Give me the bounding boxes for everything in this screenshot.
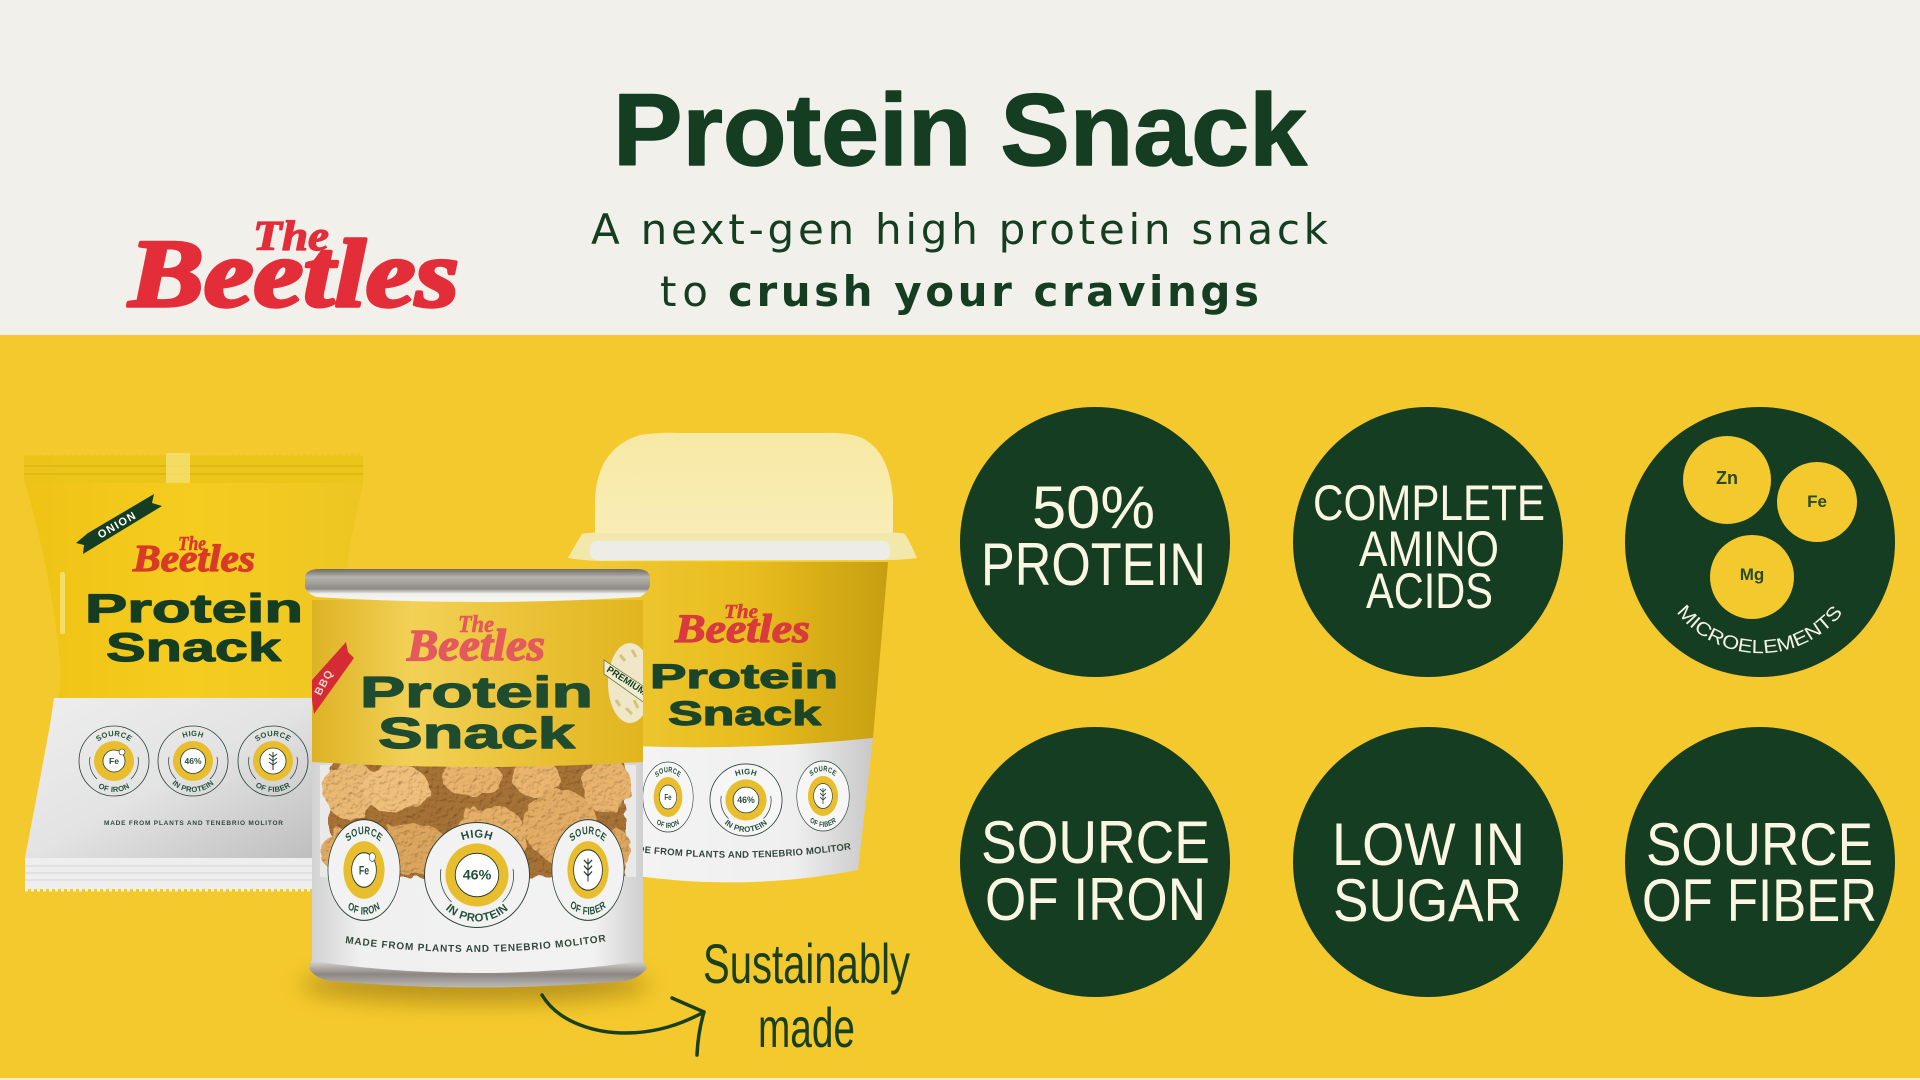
element: iron: Fe — [1807, 492, 1827, 511]
cup made-from line: MADE FROM PLANTS AND TENEBRIO MOLITOR — [643, 843, 851, 858]
bag product name — [85, 587, 303, 670]
claim: microelements — [1625, 407, 1895, 677]
ribbon: onion: ONION — [96, 509, 139, 541]
bag badge: source of iron: OF IRON — [98, 783, 130, 792]
bag upper yellow — [24, 453, 363, 700]
cup badge: source of iron: SOURCE — [655, 766, 681, 778]
claim: 50% protein: 50% — [1032, 474, 1155, 541]
can window background — [320, 765, 636, 877]
callout: sustainably made — [703, 932, 910, 1059]
ribbon: onion — [76, 494, 162, 554]
cup badge: high in protein — [710, 764, 782, 836]
bag logo: The — [178, 533, 206, 555]
cup badge: source of iron: OF IRON — [657, 819, 679, 828]
element: zinc: Zn — [1716, 468, 1738, 488]
claim: source of fiber: OF FIBER — [1642, 867, 1877, 934]
bag seal highlight — [166, 453, 190, 483]
header background — [0, 0, 1920, 335]
premium seal: PREMIUM — [604, 664, 648, 698]
cup lid dome — [595, 433, 893, 535]
brand logo: The Beetles: The — [253, 214, 329, 260]
element: zinc — [1683, 436, 1771, 524]
can badge: source of iron: OF IRON — [348, 902, 380, 915]
bag badge: source of iron: Fe — [109, 756, 119, 766]
can badge: source of iron — [328, 819, 400, 921]
bag badge: source of fiber: OF FIBER — [256, 782, 290, 792]
claim: complete amino acids: AMINO — [1359, 521, 1499, 577]
can made-from line: MADE FROM PLANTS AND TENEBRIO MOLITOR — [346, 934, 606, 952]
cup badge: source of iron: Fe — [664, 792, 672, 802]
cup badge: source of fiber: OF FIBER — [810, 818, 836, 827]
curved label: MICROELEMENTS — [1677, 604, 1841, 654]
ribbon: BBQ — [312, 642, 354, 714]
can logo: Beetles — [406, 621, 545, 670]
claim: 50% protein: PROTEIN — [981, 531, 1206, 598]
brand logo: The Beetles: Beetles — [128, 220, 459, 327]
can badge: source of iron: Fe — [359, 864, 369, 878]
product: snack cup — [568, 432, 917, 882]
cup badge: high in protein: IN PROTEIN — [724, 820, 768, 832]
cup badge: source of iron — [643, 762, 694, 832]
can yellow band — [312, 600, 643, 767]
can product name: Protein — [360, 668, 593, 717]
claim: source of fiber: SOURCE — [1646, 811, 1873, 878]
claim: source of iron: OF IRON — [985, 866, 1206, 933]
arrow — [542, 995, 704, 1055]
can product name: Snack — [378, 709, 576, 758]
can product name — [360, 668, 593, 758]
claim: complete amino acids: COMPLETE — [1313, 475, 1545, 531]
cup badge: source of fiber — [796, 760, 850, 832]
premium seal — [604, 643, 643, 723]
bag badge: source of iron — [78, 726, 150, 796]
claim: source of iron: SOURCE — [981, 809, 1210, 876]
product: snack bag — [24, 453, 363, 892]
yellow main panel — [0, 335, 1920, 1078]
ribbon: BBQ: BBQ — [313, 668, 336, 698]
element: magnesium: Mg — [1740, 565, 1764, 584]
bag badge: high in protein: 46% — [184, 756, 202, 766]
claim: complete amino acids — [1293, 407, 1563, 677]
bag badge: source of fiber — [238, 726, 308, 796]
claim: low in sugar: SUGAR — [1333, 867, 1522, 934]
bag badge: source of iron: SOURCE — [96, 730, 132, 742]
element: iron — [1777, 462, 1857, 542]
bag bottom seal — [25, 858, 320, 890]
cup product name: Protein — [650, 658, 838, 696]
cup badge: source of fiber: SOURCE — [810, 766, 837, 776]
bottom cream strip — [0, 1078, 1920, 1080]
cup logo: Beetles — [674, 606, 810, 651]
claim: low in sugar — [1293, 727, 1563, 997]
can badge: source of fiber: SOURCE — [570, 826, 607, 842]
bag product name: Protein — [85, 587, 303, 631]
subtitle: crush your cravings — [728, 267, 1259, 316]
bag badge: high in protein — [158, 726, 228, 796]
can badge: high in protein: HIGH — [460, 830, 493, 840]
claim: low in sugar: LOW IN — [1332, 811, 1525, 878]
cup logo: The — [724, 601, 758, 623]
bag lower white — [25, 698, 322, 858]
can badge: high in protein — [424, 822, 530, 928]
bag side highlight — [60, 572, 65, 634]
subtitle: A next-gen high protein snack — [591, 205, 1329, 254]
cup rim white band — [590, 541, 890, 560]
callout: sustainably made: Sustainably — [703, 932, 910, 995]
bag logo: Beetles — [132, 538, 255, 580]
can badge: high in protein: 46% — [463, 868, 492, 884]
cup badge: high in protein: HIGH — [734, 768, 757, 776]
claim: source of fiber — [1625, 727, 1895, 997]
cup badge: high in protein: 46% — [737, 795, 755, 805]
can cookies — [322, 755, 630, 877]
bag product name: Snack — [106, 626, 282, 670]
can badge: source of fiber — [552, 819, 624, 921]
can badge: source of fiber: OF FIBER — [570, 902, 606, 915]
claim: 50% protein — [960, 407, 1230, 677]
can badge: high in protein: IN PROTEIN — [446, 904, 508, 922]
subtitle — [591, 205, 1329, 316]
cup product name: Snack — [668, 695, 821, 733]
claim: complete amino acids: ACIDS — [1366, 563, 1493, 619]
claim: source of iron — [960, 727, 1230, 997]
bag badge: high in protein: HIGH — [182, 730, 204, 738]
bag badge: high in protein: IN PROTEIN — [172, 780, 214, 792]
subtitle: to — [660, 267, 708, 316]
callout: sustainably made: made — [758, 996, 855, 1059]
can badge: source of iron: SOURCE — [346, 826, 383, 842]
cup lid rim — [568, 533, 917, 561]
can lower body — [312, 760, 643, 982]
cup product name — [650, 658, 838, 733]
title: Protein Snack — [613, 73, 1307, 187]
product: can — [305, 569, 650, 988]
cup body yellow — [595, 562, 888, 747]
cup body white — [610, 738, 873, 882]
bag top seal — [24, 454, 363, 483]
element: magnesium — [1710, 535, 1794, 619]
can logo: The — [458, 612, 494, 638]
can top rim — [305, 569, 650, 602]
bag made-from line: MADE FROM PLANTS AND TENEBRIO MOLITOR — [104, 820, 284, 827]
can shadow — [300, 967, 650, 1003]
bag badge: source of fiber: SOURCE — [255, 730, 292, 742]
can bottom rim — [309, 961, 647, 988]
